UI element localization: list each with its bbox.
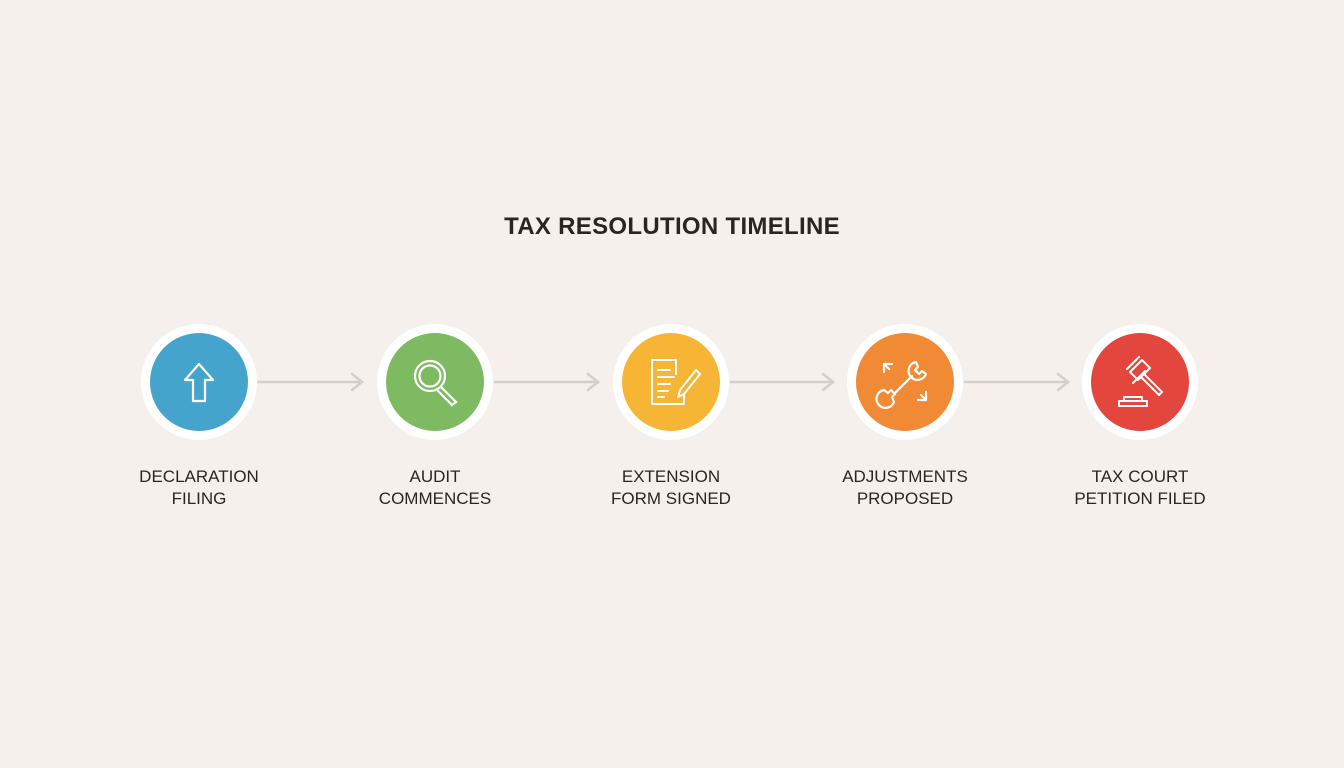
step 2: audit commences: COMMENCES [379,489,491,508]
step 2: audit commences [377,324,493,508]
arrow 4 [965,374,1068,390]
icon: gavel [1119,357,1162,406]
step 1: declaration filing [139,324,259,508]
label: TAX COURT [1092,467,1188,486]
icon: up arrow [185,364,213,401]
arrow 3 [731,374,833,390]
step 3: extension form signed [611,324,731,508]
step 5: tax court petition filed: PETITION FILED [1074,489,1206,508]
step 4: adjustments proposed: PROPOSED [857,489,953,508]
label: EXTENSION [622,467,720,486]
title: TAX RESOLUTION TIMELINE [504,213,840,240]
step 3: extension form signed: FORM SIGNED [611,489,731,508]
arrow 2 [495,374,598,390]
icon: document with pencil [652,360,700,404]
arrow 1 [258,374,362,390]
label: ADJUSTMENTS [842,467,968,486]
step 5: tax court petition filed [1074,324,1206,508]
step 1: declaration filing: FILING [172,489,226,508]
icon: wrench with arrows [877,362,926,408]
step 4: adjustments proposed [842,324,968,508]
icon: magnifier [415,361,456,405]
label: AUDIT [410,467,460,486]
label: DECLARATION [139,467,259,486]
